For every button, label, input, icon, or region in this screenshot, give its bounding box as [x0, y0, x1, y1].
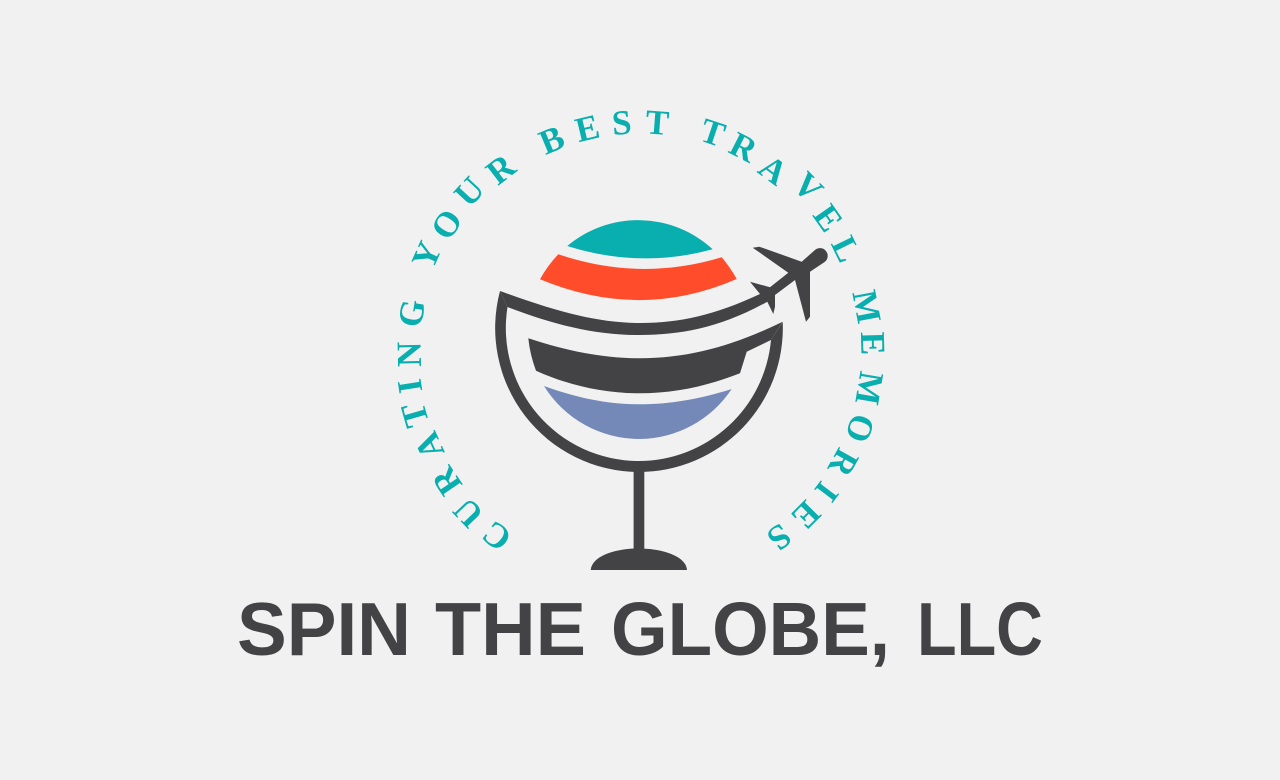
curved tagline: R	[820, 442, 866, 484]
curved tagline: R	[423, 459, 470, 502]
curved tagline: E	[805, 197, 851, 239]
globe band: dark wine	[528, 322, 783, 393]
curved tagline: I	[807, 474, 846, 509]
globe band: red	[540, 254, 737, 300]
curved tagline: T	[695, 111, 730, 155]
curved tagline: M	[847, 369, 891, 408]
curved tagline: S	[610, 102, 633, 143]
curved tagline: M	[844, 287, 889, 327]
curved tagline: T	[393, 398, 437, 432]
globe band: teal	[567, 220, 713, 258]
title	[237, 587, 1043, 671]
curved tagline: O	[837, 409, 883, 448]
curved tagline: Y	[404, 236, 450, 274]
curved tagline: T	[644, 102, 670, 143]
globe band: blue	[544, 386, 732, 439]
curved tagline: E	[853, 331, 893, 356]
curved tagline: E	[571, 107, 603, 150]
curved tagline: O	[423, 202, 470, 246]
icon: globe wine glass with airplane	[495, 220, 828, 570]
curved tagline: I	[390, 376, 430, 396]
curved tagline: R	[723, 124, 764, 171]
curved tagline: E	[784, 493, 828, 537]
curved tagline: S	[760, 516, 799, 559]
curved tagline: A	[406, 425, 452, 465]
title: LLC	[917, 587, 1043, 671]
curved tagline: U	[445, 490, 491, 535]
curved tagline: A	[752, 147, 796, 194]
curved tagline: B	[533, 117, 570, 163]
glass base	[591, 548, 687, 570]
curved tagline: R	[479, 146, 523, 192]
title: THE	[435, 587, 586, 671]
curved tagline: N	[390, 341, 429, 367]
glass stem	[634, 465, 644, 555]
curved tagline: C	[475, 513, 519, 559]
airplane with flight path	[500, 247, 828, 335]
title: SPIN	[237, 587, 411, 671]
curved tagline: G	[390, 297, 433, 330]
title: GLOBE,	[611, 587, 890, 671]
curved tagline: V	[785, 164, 831, 210]
glass bowl ring	[495, 291, 783, 472]
curved tagline: U	[446, 169, 492, 214]
curved tagline	[390, 102, 893, 559]
curved tagline: L	[823, 230, 869, 268]
